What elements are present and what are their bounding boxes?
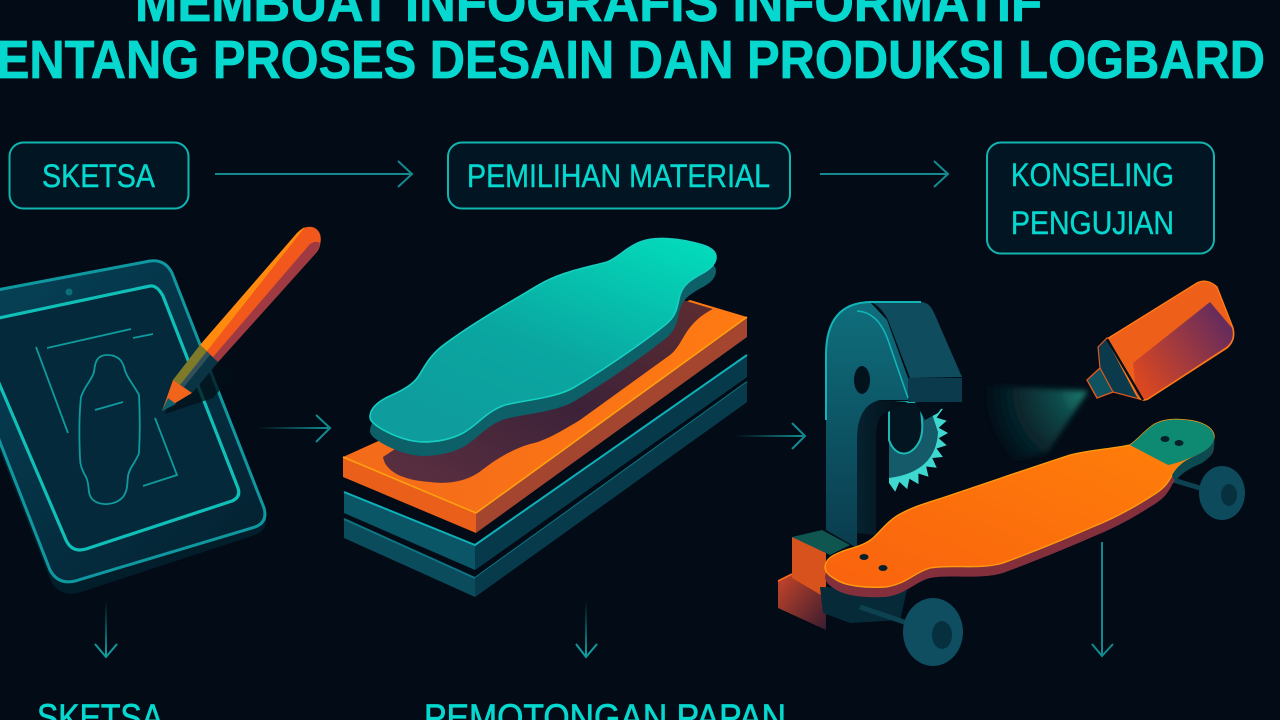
arrow: down from longboard <box>1092 542 1113 656</box>
arrow: down from tablet <box>95 600 117 657</box>
icon: front truck and wheel <box>820 587 963 666</box>
box: sketsa: SKETSA <box>42 158 156 194</box>
box: pemilihan material <box>448 142 790 208</box>
arrow: material to konseling <box>820 161 948 187</box>
icon: machine base <box>778 530 850 630</box>
icon: rear wheel and axle <box>1173 466 1245 520</box>
arrow: layers to machine <box>735 423 805 449</box>
title <box>0 0 1265 90</box>
icon: longboard deck <box>825 419 1214 597</box>
arrow: tablet to layers <box>257 415 330 442</box>
icon: stacked layers and board blank <box>343 238 747 597</box>
icon: spray can <box>1087 281 1234 400</box>
icon: saw blade <box>889 402 948 492</box>
box: sketsa <box>10 142 188 208</box>
box: konseling pengujian <box>987 142 1214 254</box>
icon: pencil <box>162 227 321 414</box>
icon: paint mist <box>965 385 1088 475</box>
arrow: down from layers <box>576 600 597 657</box>
arrow: sketsa to material <box>215 161 412 187</box>
box: pemilihan material: PEMILIHAN MATERIAL <box>467 158 770 194</box>
icon: cutting machine column <box>826 302 962 548</box>
box: konseling pengujian: PENGUJIAN <box>1011 205 1174 241</box>
box: konseling pengujian: KONSELING <box>1011 157 1174 193</box>
icon: tablet with sketch <box>0 261 266 594</box>
